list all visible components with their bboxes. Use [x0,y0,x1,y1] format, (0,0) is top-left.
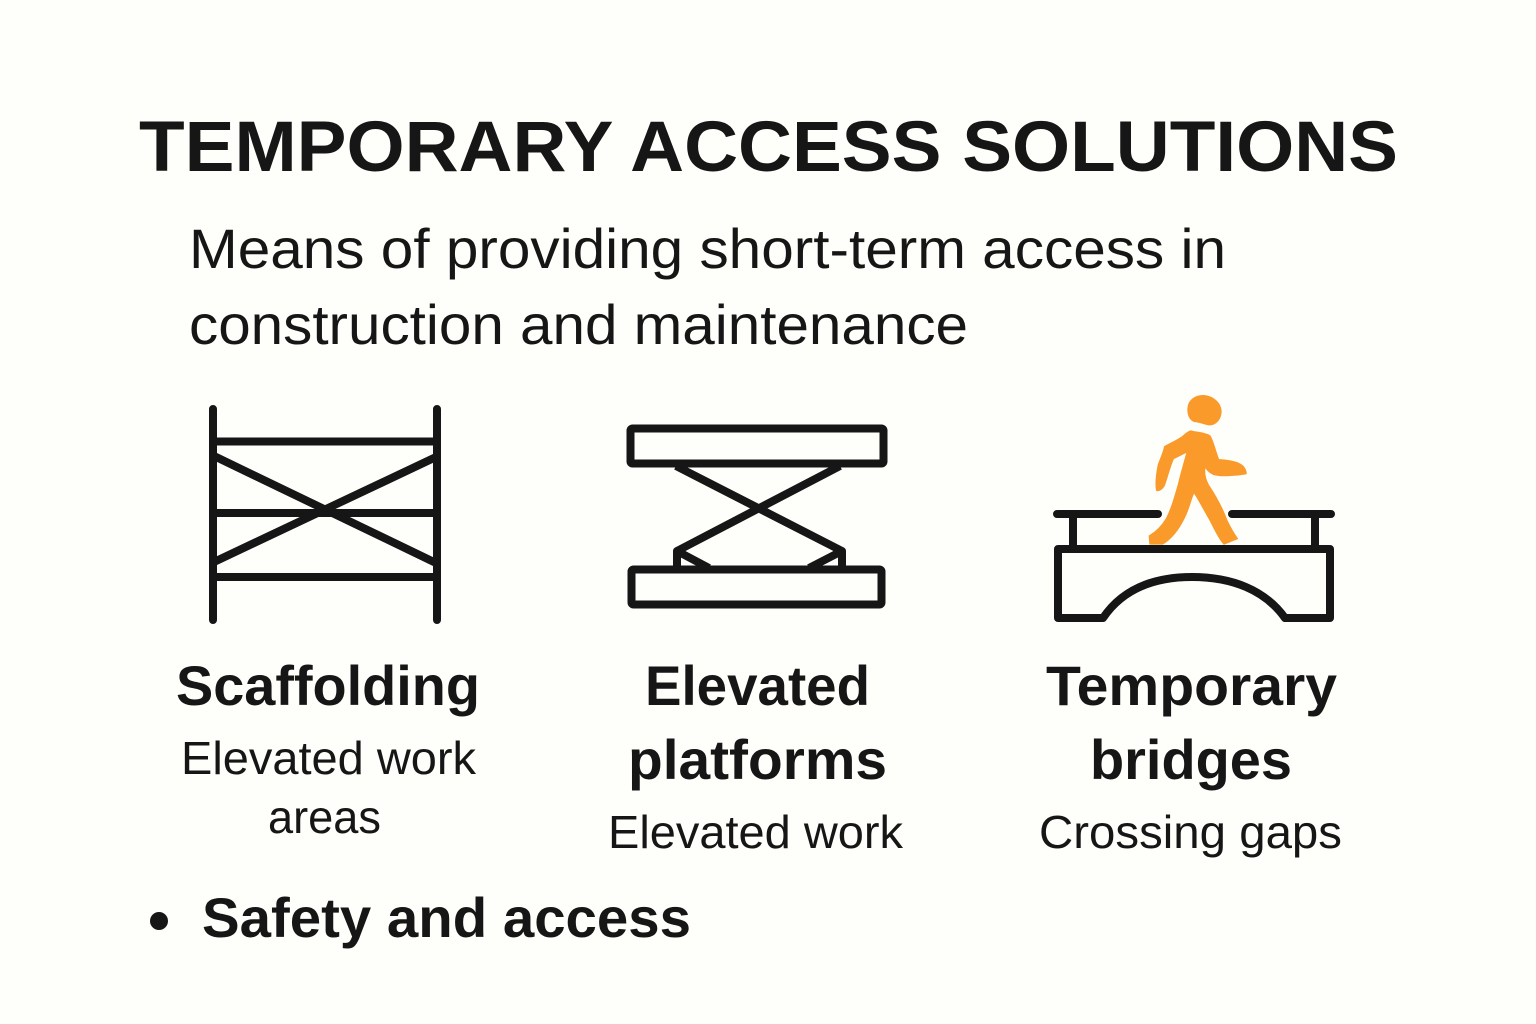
heading: scaffolding: Scaffolding [176,654,480,717]
subtitle [189,217,1226,356]
description: elevated platforms: Elevated work [608,806,904,858]
heading: elevated platforms [628,654,887,791]
panel: elevated platforms [608,428,904,858]
panel: temporary bridges [1039,396,1342,858]
heading: elevated platforms: platforms [628,728,887,791]
icon: scissor lift [630,428,884,604]
description: scaffolding [181,732,477,843]
heading: temporary bridges: Temporary [1046,654,1337,717]
description: scaffolding: Elevated work [181,732,477,784]
heading: temporary bridges [1046,654,1337,791]
icon: bridge with walking person [1057,396,1331,618]
heading: temporary bridges: bridges [1090,728,1292,791]
description: scaffolding: areas [268,791,381,843]
panel: scaffolding [176,409,480,843]
title: TEMPORARY ACCESS SOLUTIONS [139,108,1398,187]
description: temporary bridges: Crossing gaps [1039,806,1342,858]
person walking [1149,396,1246,544]
subtitle: construction and maintenance [189,293,968,356]
bullet: safety and access: Safety and access [202,886,691,949]
heading: elevated platforms: Elevated [645,654,870,717]
bridge structure [1057,514,1331,618]
subtitle: Means of providing short-term access in [189,217,1226,280]
icon: scaffolding [213,409,437,620]
